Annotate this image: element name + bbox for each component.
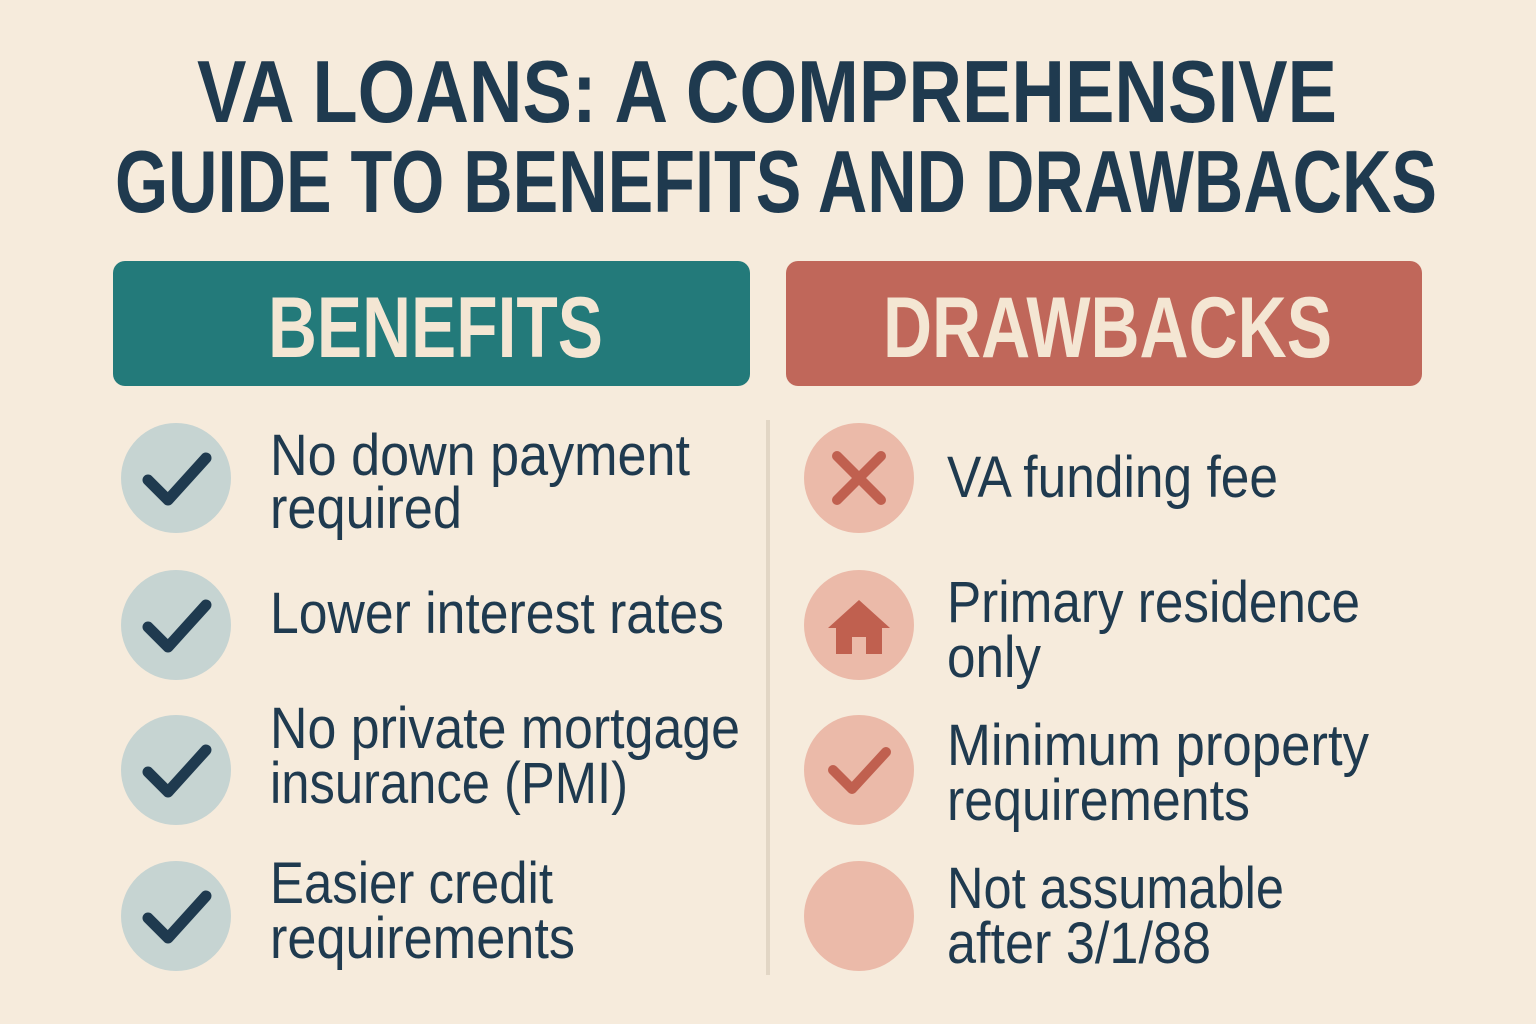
text: primary residence: Primary residence — [947, 570, 1360, 635]
text: easier credit: Easier credit — [270, 851, 553, 916]
text: lower interest rates: Lower interest rates — [270, 581, 724, 646]
text: not assumable: after 3/1/88 — [947, 911, 1211, 976]
text: primary residence: only — [947, 625, 1041, 690]
icon: check 3 — [121, 715, 231, 825]
text: funding fee: VA funding fee — [947, 445, 1278, 510]
text: minimum property: Minimum property — [947, 713, 1369, 778]
header: drawbacks — [786, 261, 1422, 386]
icon: x — [804, 423, 914, 533]
icon: blank circle — [804, 861, 914, 971]
icon: check 4 — [121, 861, 231, 971]
text: no down payment: No down payment — [270, 423, 690, 488]
icon: check 1 — [121, 423, 231, 533]
text: no PMI: insurance (PMI) — [270, 751, 628, 816]
text: minimum property: requirements — [947, 768, 1250, 833]
title — [115, 42, 1437, 231]
text: primary residence — [947, 570, 1360, 690]
panel: drawbacks list — [804, 423, 1369, 976]
icon: check red — [804, 715, 914, 825]
header: drawbacks: DRAWBACKS — [883, 280, 1332, 376]
title: VA LOANS: A COMPREHENSIVE — [197, 42, 1337, 141]
icon: check 2 — [121, 570, 231, 680]
text: easier credit: requirements — [270, 906, 575, 971]
text: not assumable: Not assumable — [947, 856, 1284, 921]
text: minimum property — [947, 713, 1369, 833]
icon: house — [804, 570, 914, 680]
text: no PMI: No private mortgage — [270, 696, 740, 761]
header: benefits — [113, 261, 750, 386]
text: no down payment — [270, 423, 690, 541]
header: benefits: BENEFITS — [268, 280, 603, 376]
text: not assumable — [947, 856, 1284, 976]
panel: benefits list — [121, 423, 740, 971]
text: easier credit — [270, 851, 575, 971]
text: no down payment: required — [270, 476, 462, 541]
text: no PMI — [270, 696, 740, 816]
